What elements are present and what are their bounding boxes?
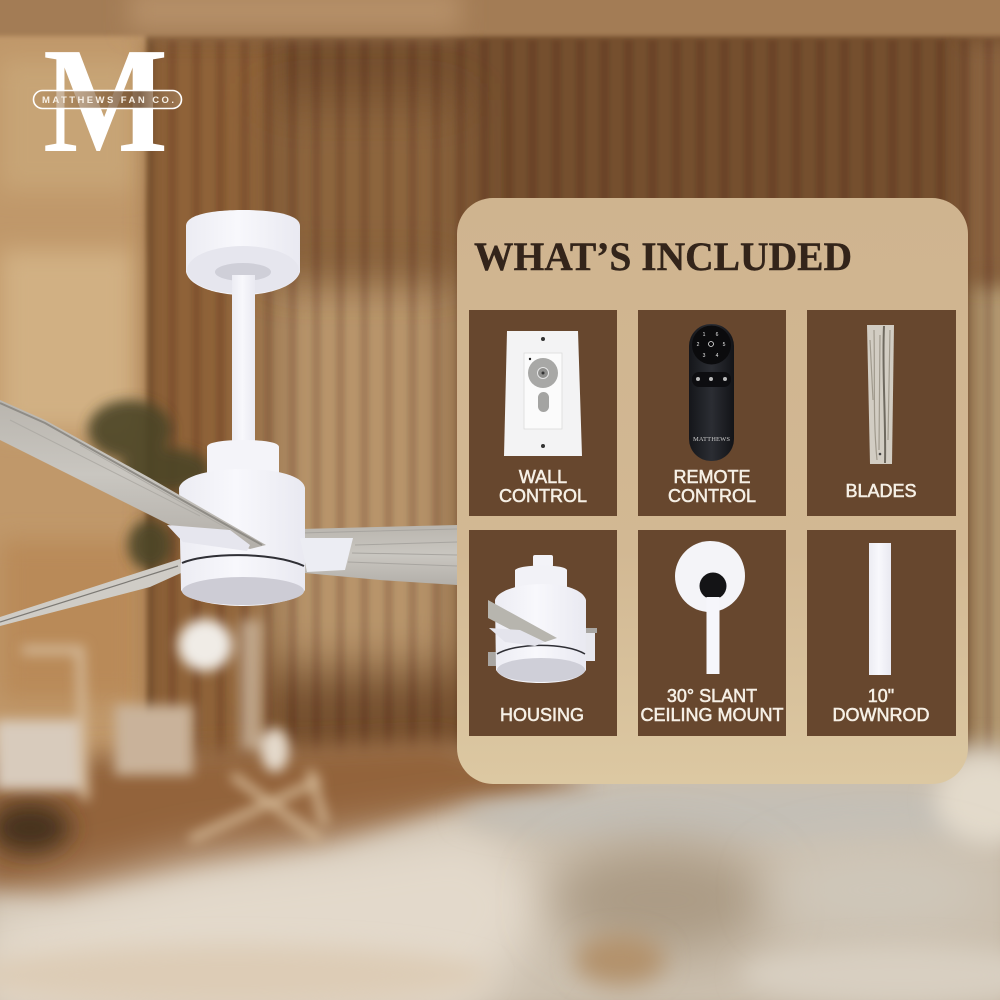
tile: remote control	[638, 310, 786, 516]
icon: wall plate	[504, 331, 582, 456]
fan blade: lower left	[0, 559, 181, 626]
icon: remote: 5	[723, 342, 726, 348]
tile: slant ceiling mount	[638, 530, 786, 736]
downrod	[232, 275, 255, 443]
icon: downrod	[869, 543, 891, 675]
icon: ceiling mount	[675, 541, 745, 674]
label: CONTROL	[499, 486, 587, 506]
ceiling canopy	[186, 210, 300, 295]
floor	[0, 745, 1000, 1000]
icon: motor housing	[488, 555, 597, 683]
top band	[0, 0, 1000, 36]
fan blade: right	[300, 525, 457, 585]
label: 30° SLANT	[667, 686, 757, 706]
icon: remote: 1	[703, 332, 706, 338]
label: CONTROL	[668, 486, 756, 506]
left wall	[0, 0, 146, 820]
label: 10"	[868, 686, 894, 706]
icon: remote	[689, 324, 734, 461]
panel: what's included	[457, 198, 968, 784]
label: CEILING MOUNT	[640, 705, 784, 725]
label: WALL	[519, 467, 567, 487]
label: BLADES	[845, 481, 917, 501]
ceiling fan	[0, 210, 457, 626]
tile: blades	[807, 310, 956, 516]
heading: WHAT’S INCLUDED	[474, 234, 852, 279]
icon: remote: 3	[703, 353, 706, 359]
blade bracket: right	[300, 538, 353, 572]
label: DOWNROD	[832, 705, 930, 725]
tile: downrod	[807, 530, 956, 736]
label: HOUSING	[500, 705, 584, 725]
blurred furniture	[0, 619, 325, 840]
motor housing	[179, 440, 305, 606]
icon: remote: 6	[716, 332, 719, 338]
icon: remote: 4	[716, 353, 719, 359]
icon: remote: MATTHEWS	[693, 436, 730, 443]
slat wall	[150, 36, 1000, 806]
logo: Matthews Fan Co.: M	[43, 16, 168, 184]
tile: housing	[469, 530, 617, 736]
fan blade: upper left	[0, 400, 266, 551]
icon: blade	[867, 325, 894, 464]
icon: remote: 2	[697, 342, 700, 348]
tile: wall control	[469, 310, 617, 516]
plant	[88, 400, 210, 570]
logo: Matthews Fan Co.: MATTHEWS FAN CO.	[42, 95, 174, 106]
label: REMOTE	[673, 467, 751, 487]
